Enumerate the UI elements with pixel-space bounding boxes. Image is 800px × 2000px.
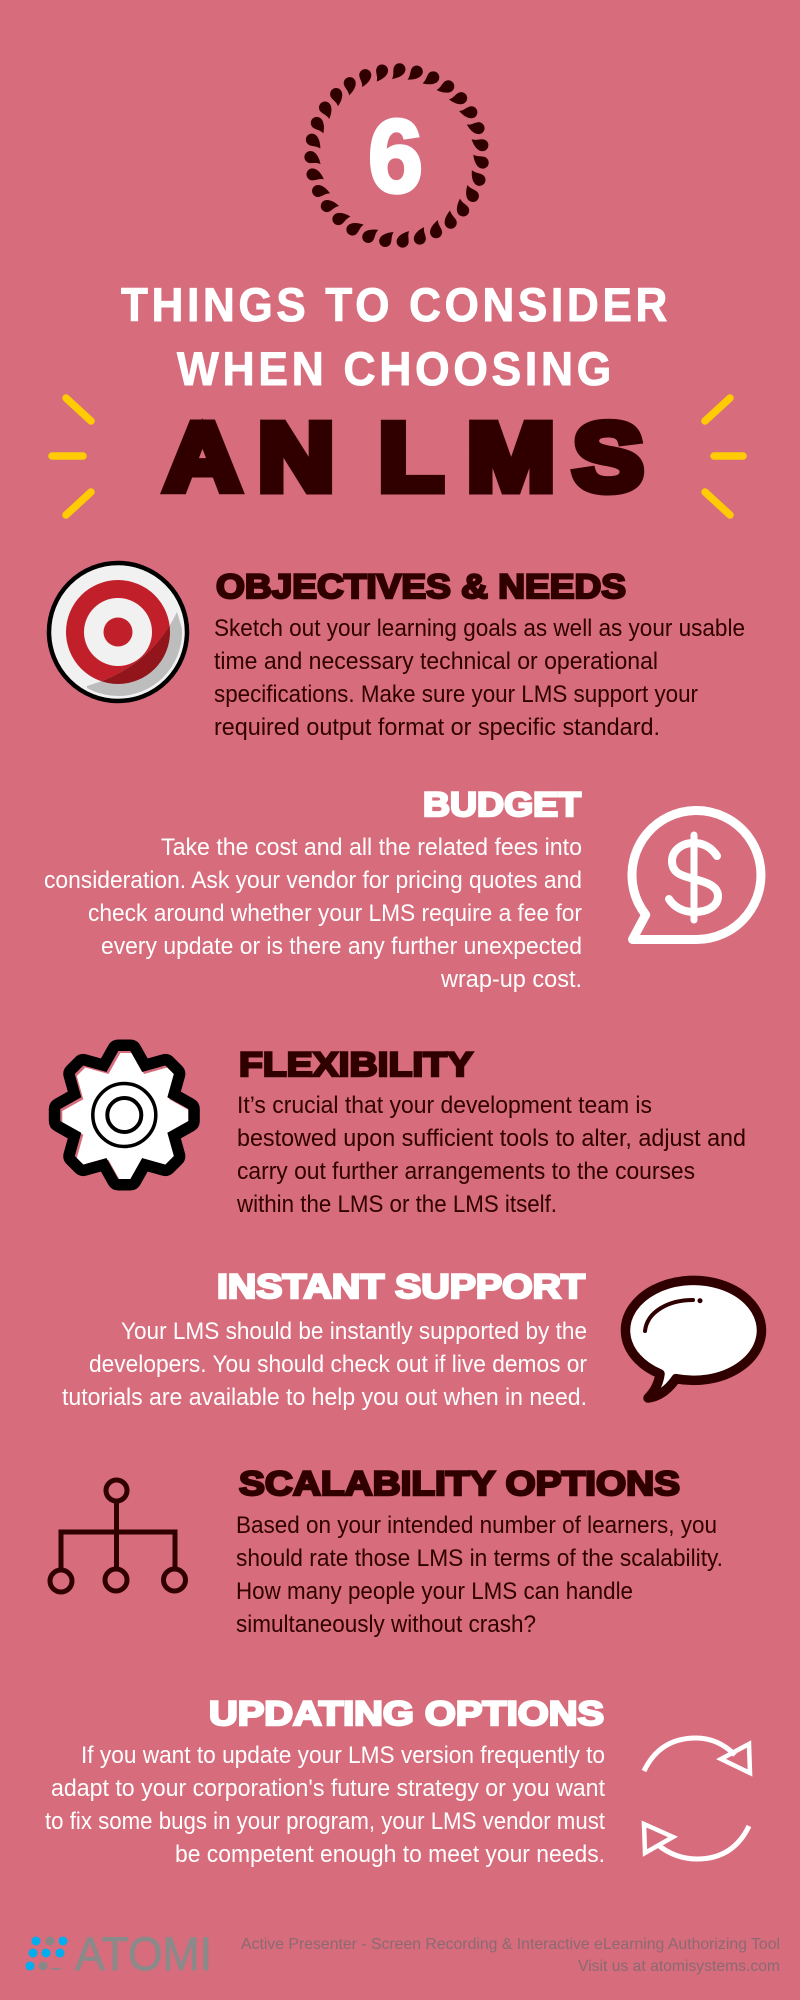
icon: refresh arrows — [644, 1738, 750, 1859]
title — [121, 278, 671, 511]
icon: ring of drops — [304, 63, 489, 248]
heading: FLEXIBILITY — [239, 1046, 473, 1084]
body text: It’s crucial that your development team is — [237, 1092, 652, 1119]
footer text: Visit us at atomisystems.com — [578, 1958, 780, 1975]
logo dots — [26, 1936, 68, 1970]
panel: scalability options — [50, 1465, 723, 1638]
title line 1: THINGS TO CONSIDER — [121, 278, 671, 331]
body text: be competent enough to meet your needs. — [175, 1841, 605, 1868]
header badge: number 6 in ring — [304, 63, 489, 248]
title line 2: WHEN CHOOSING — [177, 342, 615, 395]
icon: target — [46, 560, 190, 704]
body text: Take the cost and all the related fees into — [161, 834, 582, 861]
heading: BUDGET — [423, 786, 581, 824]
panel: instant support — [62, 1268, 764, 1411]
icon: dollar speech bubble — [632, 810, 761, 940]
body text: If you want to update your LMS version frequently to — [81, 1742, 605, 1769]
body text: tutorials are available to help you out when in need. — [62, 1384, 587, 1411]
body text: simultaneously without crash? — [236, 1611, 536, 1638]
footer text: Active Presenter - Screen Recording & Interactive eLearning Authorizing Tool — [241, 1936, 780, 1953]
logo: Atomi — [26, 1927, 212, 1980]
body text: bestowed upon sufficient tools to alter, adjust and — [237, 1125, 746, 1152]
body text: to fix some bugs in your program, your LMS vendor must — [45, 1808, 605, 1835]
body text: every update or is there any further unexpected — [101, 933, 582, 960]
heading: SCALABILITY OPTIONS — [239, 1465, 680, 1503]
body text: should rate those LMS in terms of the scalability. — [236, 1545, 723, 1572]
icon: speech bubble — [625, 1280, 764, 1400]
body text: How many people your LMS can handle — [236, 1578, 633, 1605]
body text — [236, 1512, 723, 1638]
body text: within the LMS or the LMS itself. — [236, 1191, 557, 1218]
number 6: 6 — [368, 99, 423, 215]
panel: flexibility — [60, 1046, 746, 1218]
body text: developers. You should check out if live demos or — [89, 1351, 587, 1378]
footer — [26, 1927, 780, 1980]
heading: INSTANT SUPPORT — [217, 1268, 585, 1306]
body text: carry out further arrangements to the courses — [237, 1158, 695, 1185]
body text — [45, 1742, 605, 1868]
heading: UPDATING OPTIONS — [209, 1695, 604, 1733]
heading: OBJECTIVES & NEEDS — [216, 568, 626, 606]
panel: updating options — [45, 1695, 750, 1868]
icon: hierarchy tree — [50, 1480, 186, 1592]
body text — [62, 1318, 587, 1411]
title line 3: AN LMS — [164, 404, 643, 511]
icon: yellow rays left — [52, 398, 91, 515]
body text — [236, 1092, 746, 1218]
body text: Based on your intended number of learners, you — [236, 1512, 717, 1539]
footer text — [241, 1936, 780, 1975]
body text: check around whether your LMS require a fee for — [88, 900, 582, 927]
panel: budget — [44, 786, 761, 993]
panel: objectives and needs — [49, 563, 745, 741]
body text: adapt to your corporation's future strategy or you want — [51, 1775, 605, 1802]
icon: gear — [60, 1051, 190, 1181]
body text: consideration. Ask your vendor for pricing quotes and — [44, 867, 582, 894]
body text — [44, 834, 582, 993]
body text: required output format or specific standard. — [214, 714, 660, 741]
logo wordmark: ATOMI — [75, 1927, 212, 1980]
body text: Your LMS should be instantly supported by the — [121, 1318, 587, 1345]
body text: Sketch out your learning goals as well as your usable — [214, 615, 745, 642]
body text: specifications. Make sure your LMS support your — [214, 681, 698, 708]
body text: wrap-up cost. — [440, 966, 582, 993]
icon: yellow rays right — [705, 398, 743, 515]
body text — [214, 615, 745, 741]
body text: time and necessary technical or operational — [214, 648, 658, 675]
